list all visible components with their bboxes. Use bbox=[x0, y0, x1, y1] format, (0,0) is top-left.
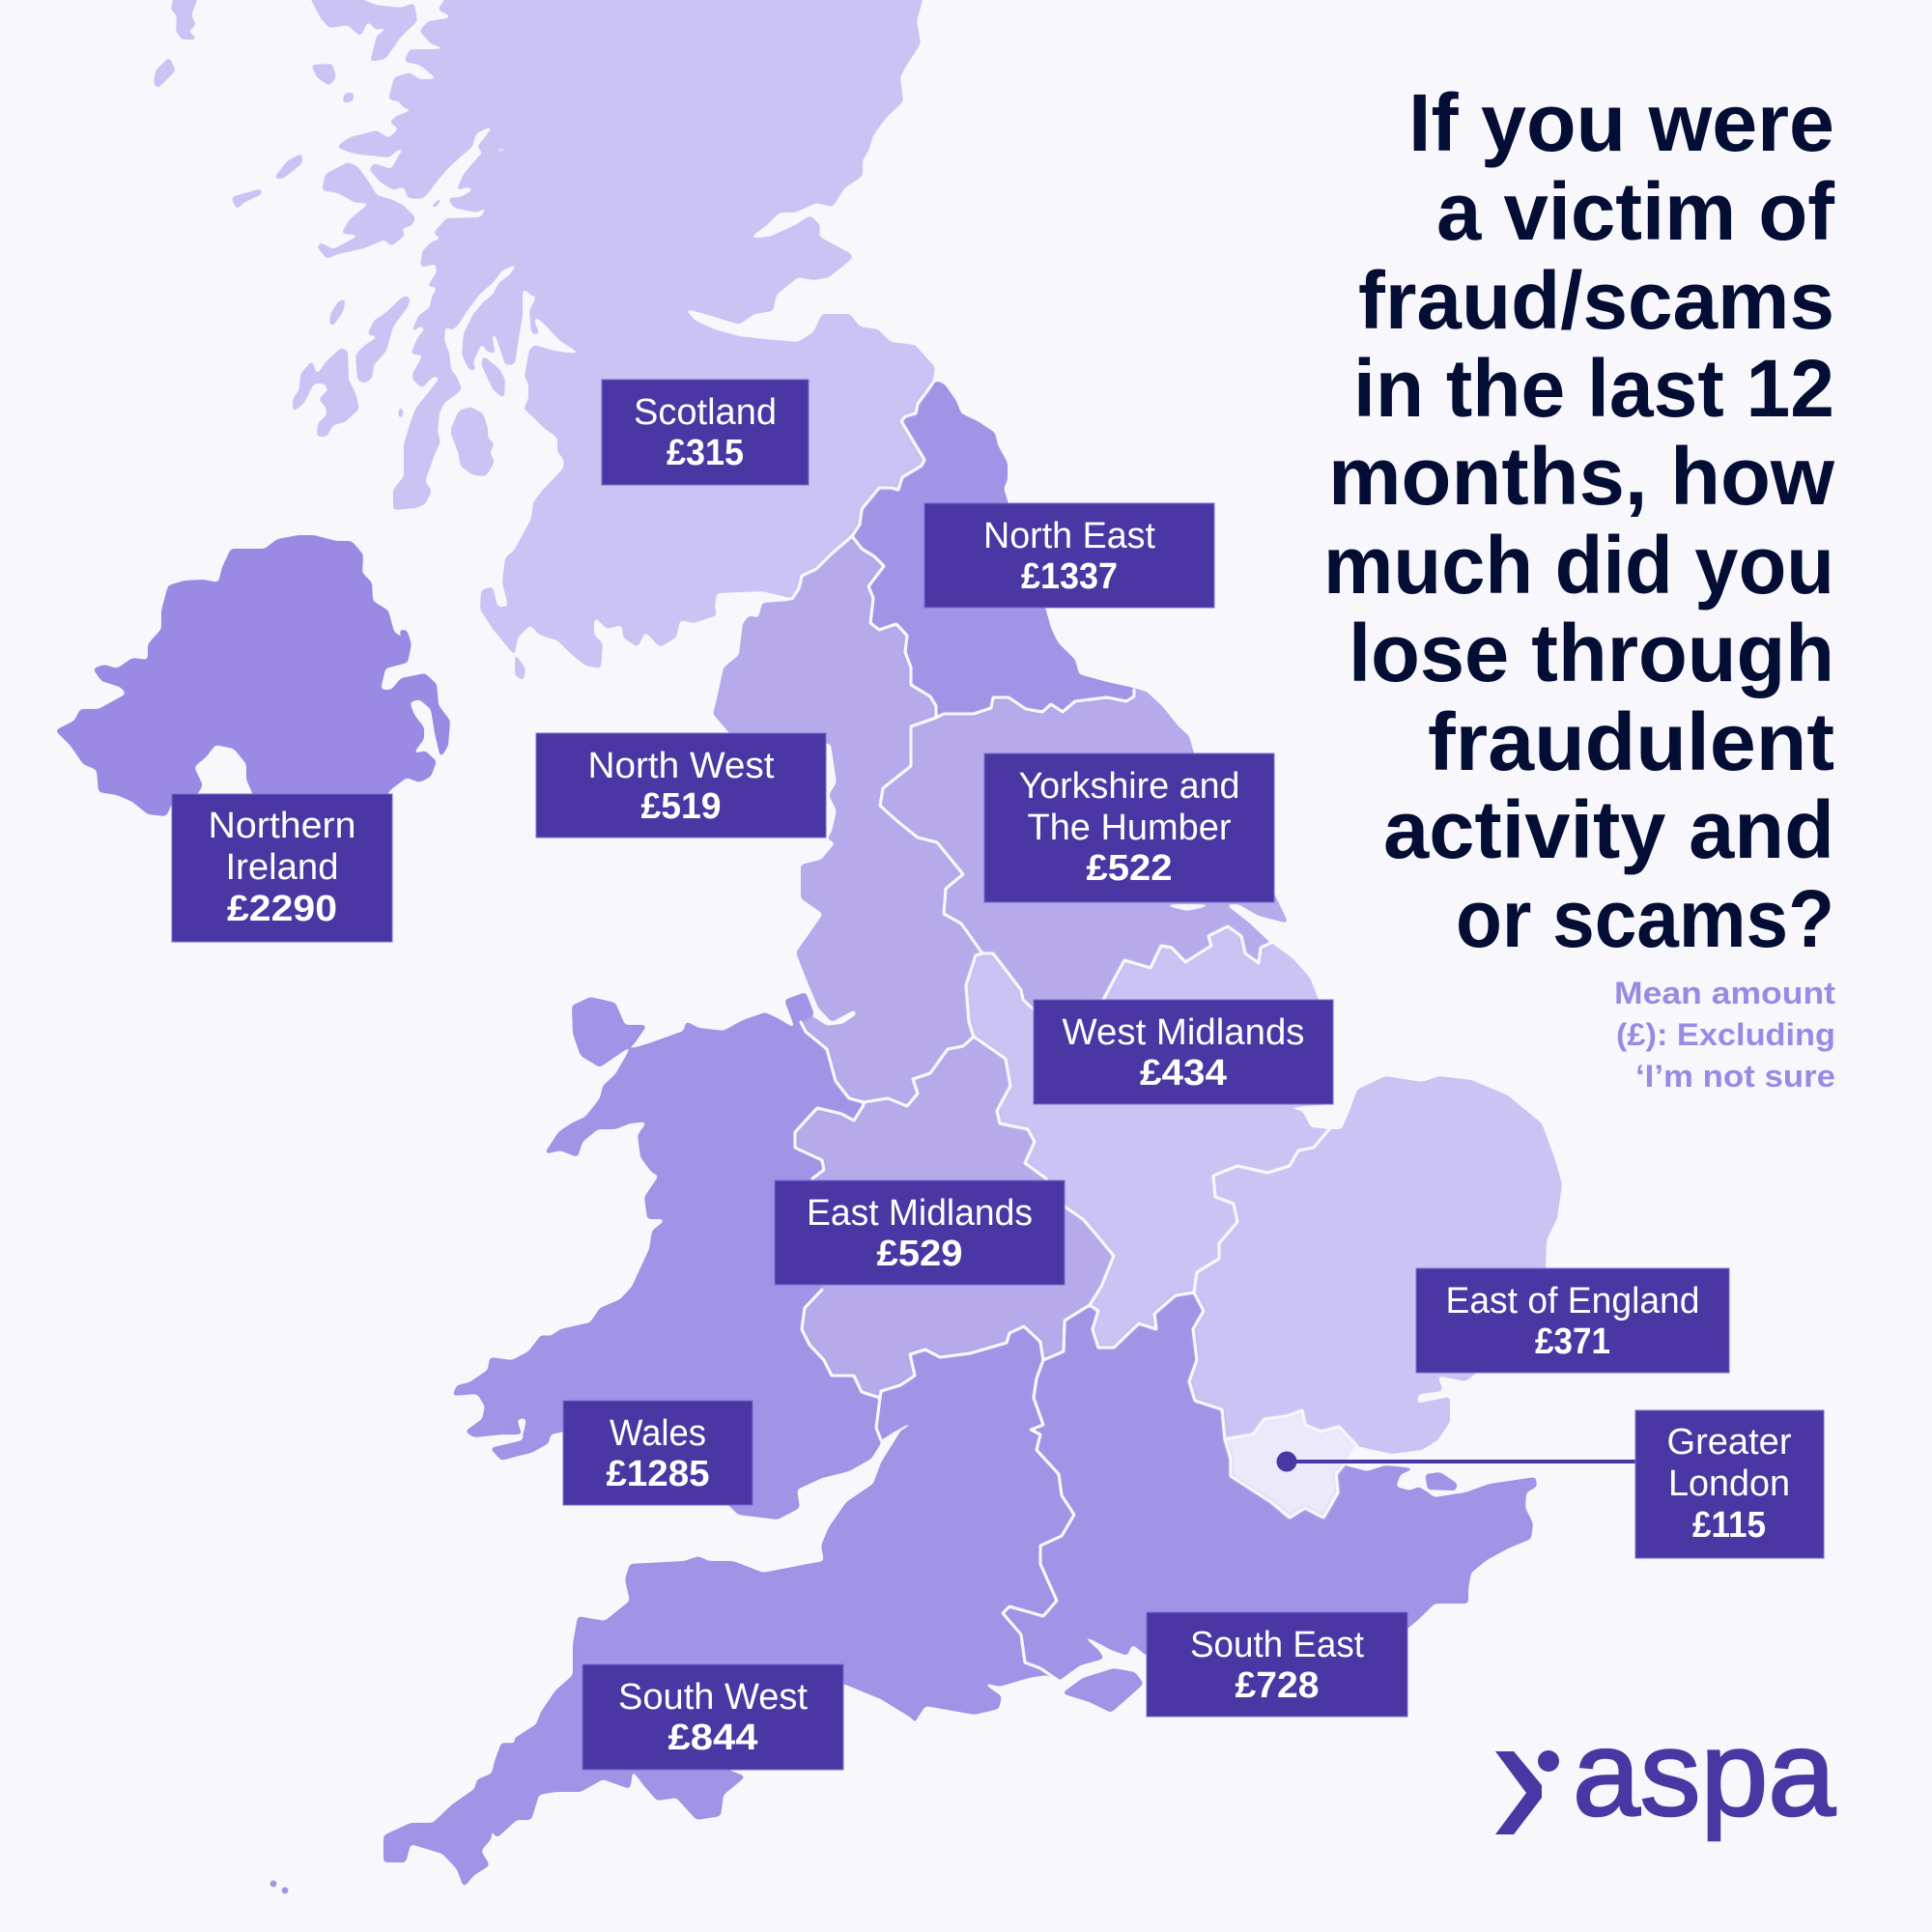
title: a victim of bbox=[1436, 166, 1835, 257]
label: Northern Ireland: Northern bbox=[209, 806, 355, 846]
title: fraudulent bbox=[1428, 696, 1834, 787]
label: Greater London: Greater bbox=[1667, 1422, 1792, 1463]
region: Greater London bbox=[1225, 1410, 1357, 1518]
label: Northern Ireland: £2290 bbox=[227, 889, 337, 929]
label: North East: £1337 bbox=[1021, 556, 1118, 597]
regional boundary lines bbox=[792, 383, 1357, 1681]
region: Northern Ireland bbox=[55, 535, 450, 816]
region: Wales bbox=[452, 992, 881, 1520]
label: South West: £844 bbox=[668, 1718, 757, 1758]
label: East of England bbox=[1416, 1268, 1729, 1373]
label: Wales bbox=[563, 1401, 753, 1505]
label: South West bbox=[582, 1664, 843, 1770]
label: East Midlands bbox=[775, 1180, 1065, 1285]
label: North West: North West bbox=[587, 746, 775, 786]
title: activity and bbox=[1383, 784, 1834, 875]
title: If you were bbox=[1408, 77, 1834, 168]
label: East of England: East of England bbox=[1445, 1281, 1700, 1321]
label: Northern Ireland bbox=[172, 794, 392, 942]
subtitle note: (£): Excluding bbox=[1616, 1017, 1835, 1052]
label: Greater London bbox=[1635, 1410, 1824, 1558]
region: Yorkshire and The Humber bbox=[880, 688, 1289, 1009]
title: fraud/scams bbox=[1358, 255, 1834, 346]
callout line: Greater London bbox=[1277, 1451, 1635, 1472]
label: Yorkshire and The Humber bbox=[984, 753, 1274, 902]
label: Northern Ireland: Ireland bbox=[226, 847, 338, 888]
label: South East bbox=[1147, 1612, 1407, 1717]
label: West Midlands: West Midlands bbox=[1063, 1012, 1304, 1053]
label: West Midlands: £434 bbox=[1140, 1053, 1227, 1094]
title: in the last 12 bbox=[1353, 343, 1834, 434]
subtitle note: ‘I’m not sure bbox=[1635, 1059, 1835, 1094]
label: Scotland bbox=[602, 380, 809, 485]
title: much did you bbox=[1323, 520, 1834, 611]
logo: yaspa: aspa bbox=[1573, 1707, 1835, 1841]
label: East Midlands: £529 bbox=[877, 1234, 962, 1274]
label: North East: North East bbox=[983, 516, 1155, 556]
region: West Midlands bbox=[966, 926, 1332, 1348]
label: Greater London: £115 bbox=[1692, 1505, 1766, 1546]
region: South East bbox=[1003, 1293, 1537, 1713]
subtitle note: Mean amount bbox=[1614, 976, 1835, 1010]
label: Yorkshire and The Humber: £522 bbox=[1086, 848, 1173, 889]
label: South West: South West bbox=[618, 1677, 808, 1718]
label: Yorkshire and The Humber: Yorkshire and bbox=[1018, 766, 1240, 807]
region: East of England bbox=[1189, 1076, 1562, 1454]
label: Scotland: £315 bbox=[667, 433, 744, 473]
label: Yorkshire and The Humber: The Humber bbox=[1028, 808, 1232, 848]
region: Scotland bbox=[154, 0, 935, 681]
label: North West bbox=[536, 733, 826, 838]
title: or scams? bbox=[1456, 873, 1834, 964]
region: East Midlands bbox=[795, 1037, 1114, 1398]
region: South West bbox=[270, 1326, 1074, 1894]
region: North West bbox=[713, 536, 982, 1106]
region: North East bbox=[852, 381, 1134, 718]
label: North East bbox=[924, 503, 1214, 608]
label: Greater London: London bbox=[1668, 1463, 1790, 1504]
title: months, how bbox=[1328, 431, 1835, 522]
label: East Midlands: East Midlands bbox=[807, 1193, 1033, 1234]
label: Scotland: Scotland bbox=[634, 392, 777, 433]
label: Wales: Wales bbox=[610, 1413, 706, 1454]
label: South East: £728 bbox=[1235, 1665, 1320, 1706]
map of the UK bbox=[55, 0, 1562, 1894]
label: East of England: £371 bbox=[1535, 1321, 1610, 1362]
label: West Midlands bbox=[1034, 1000, 1333, 1104]
title: lose through bbox=[1349, 608, 1834, 698]
label: North West: £519 bbox=[641, 786, 721, 827]
label: South East: South East bbox=[1190, 1625, 1364, 1665]
label: Wales: £1285 bbox=[607, 1454, 709, 1494]
